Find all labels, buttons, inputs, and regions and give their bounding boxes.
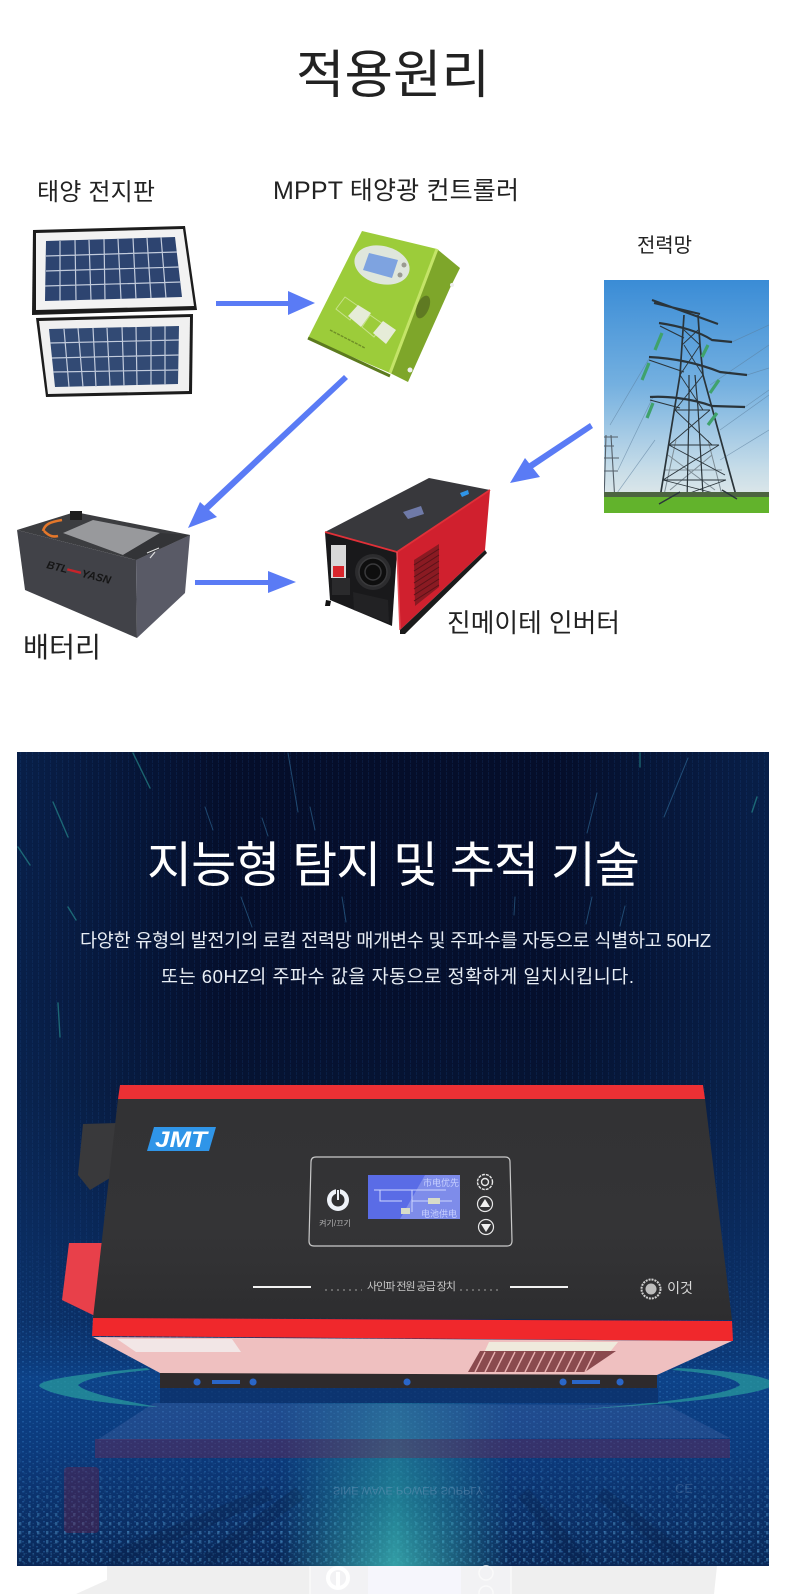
- panel: smart detection technology: [17, 752, 775, 1566]
- description line 2: 또는 60HZ의 주파수 값을 자동으로 정확하게 일치시킵니다.: [161, 966, 634, 987]
- logo: JMT: JMT: [155, 1127, 209, 1152]
- reflected product text: SINE WAVE POWER SUPPLY: [333, 1484, 484, 1496]
- back lattice: [664, 440, 722, 495]
- icon: down button: [478, 1220, 494, 1234]
- heading: 지능형 탐지 및 추적 기술: [147, 839, 640, 893]
- arrow: battery to inverter: [195, 571, 296, 593]
- green insulators: [642, 333, 719, 425]
- black side connector: [78, 1123, 118, 1190]
- red top strip: [118, 1085, 705, 1099]
- icon: upper solar panel: [32, 226, 197, 315]
- glow ring, right crescent: [573, 1368, 775, 1410]
- diagram: solar panels: [32, 179, 197, 397]
- main tower: [649, 300, 747, 504]
- logo: battery brand: BTL: [45, 559, 69, 576]
- black top face: [93, 1099, 732, 1320]
- diagram: inverter: [325, 478, 620, 638]
- product: large inverter: [62, 1085, 733, 1388]
- icon: up button: [478, 1196, 492, 1212]
- label: solar panel: 태양 전지판: [37, 179, 155, 206]
- front labels and vent: [117, 1339, 618, 1372]
- diagram: MPPT controller: [273, 177, 519, 382]
- diagram: power grid: [604, 234, 769, 513]
- background streaks: [18, 753, 757, 1037]
- logo: JMT: [147, 1127, 216, 1152]
- LCD screen: 电池供电: [421, 1208, 457, 1219]
- red side connector: [62, 1243, 104, 1316]
- bracket: [160, 1372, 657, 1388]
- product reflection: CE: [675, 1481, 693, 1496]
- label: power grid: 전력망: [637, 234, 692, 257]
- ISO badge: [642, 1280, 693, 1298]
- diagram: battery: [17, 511, 190, 663]
- icon: green controller: [308, 231, 460, 382]
- icon: settings button: [478, 1174, 492, 1190]
- product name line: 사인파 전원 공급 장치: [367, 1280, 456, 1293]
- red front strip: [92, 1318, 733, 1341]
- logo: battery brand: YASN: [80, 568, 113, 587]
- power lines: [610, 325, 769, 500]
- product reflection: [64, 1388, 730, 1533]
- icon: lower solar panel: [36, 314, 193, 397]
- power label: 켜기/끄기: [319, 1219, 351, 1228]
- label: MPPT controller: MPPT 태양광 컨트롤러: [273, 177, 519, 205]
- glow ring, left crescent: [39, 1368, 158, 1407]
- arrow: controller to battery: [188, 375, 348, 528]
- icon: red inverter: [325, 478, 490, 634]
- logo: battery brand: [45, 559, 113, 587]
- photo: transmission tower: [604, 280, 769, 513]
- panel background: [17, 752, 769, 1566]
- arrow: grid to inverter: [510, 423, 593, 483]
- icon: battery pack: [17, 511, 190, 638]
- description line 1: 다양한 유형의 발전기의 로컬 전력망 매개변수 및 주파수를 자동으로 식별하고 50HZ: [80, 930, 711, 951]
- footer: cropped grey reflection: [76, 1566, 717, 1594]
- control panel: [309, 1157, 512, 1246]
- LCD screen: [368, 1175, 460, 1219]
- ISO badge: 이것: [667, 1280, 693, 1296]
- label: inverter: 진메이테 인버터: [447, 608, 620, 638]
- far tower: [604, 435, 619, 492]
- arrow: solar panel to controller: [216, 291, 315, 315]
- LCD screen: 市电优先: [423, 1177, 459, 1188]
- title: 적용원리: [296, 47, 490, 105]
- icon: power button: [327, 1189, 349, 1211]
- pink front face: [93, 1337, 732, 1375]
- label: battery: 배터리: [23, 632, 101, 663]
